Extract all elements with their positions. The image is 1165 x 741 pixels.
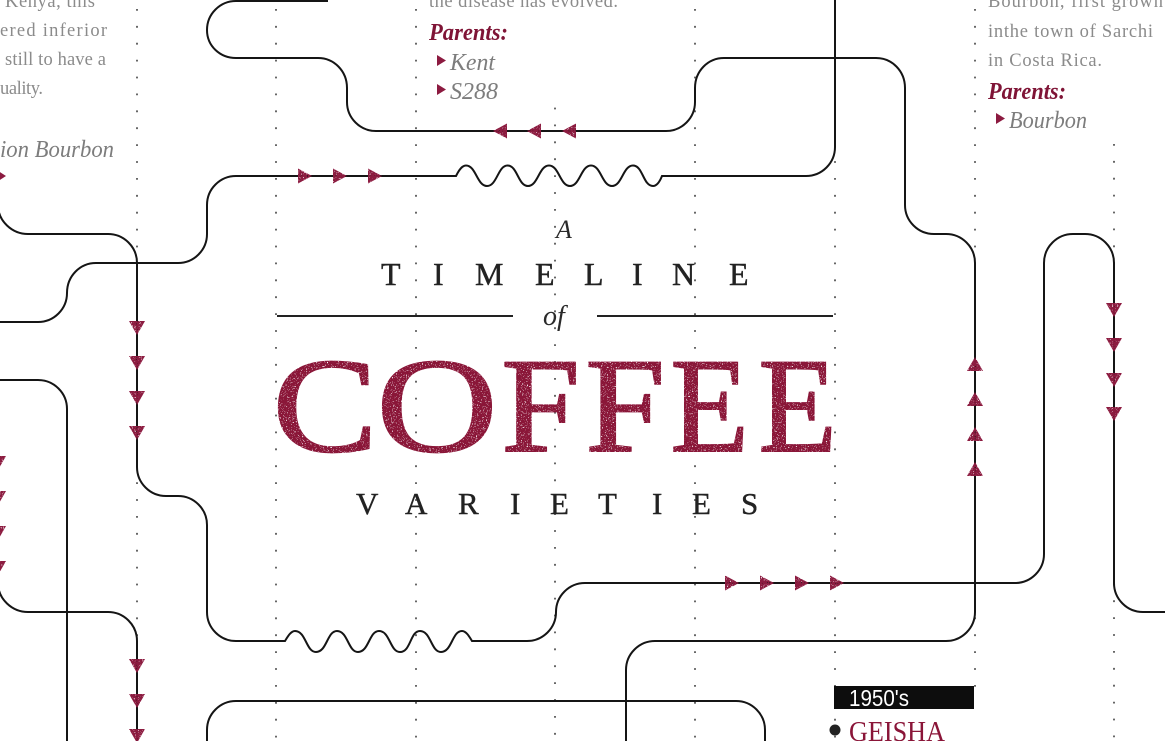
arrows: left column down bbox=[129, 321, 145, 440]
text block: right description and parents: inthe town of Sarchi bbox=[988, 22, 1153, 42]
text block: right description and parents bbox=[987, 0, 1163, 134]
title word: of: of bbox=[543, 301, 568, 332]
text block: right description and parents: Bourbon bbox=[1009, 108, 1087, 134]
title word: Coffee: F bbox=[501, 332, 580, 481]
arrows: top left-pointing bbox=[493, 124, 576, 138]
text block: centre description and parents bbox=[428, 0, 618, 105]
text block: left description bbox=[0, 0, 114, 183]
title word: Coffee: O bbox=[376, 332, 498, 481]
title bbox=[273, 215, 837, 521]
title word: Varieties: VARIETIES bbox=[356, 486, 758, 521]
arrows: top right-pointing bbox=[298, 168, 382, 184]
text block: right description and parents: in Costa Rica. bbox=[988, 51, 1102, 71]
title word: Coffee: C bbox=[273, 332, 378, 481]
decade label: 1950's bbox=[834, 685, 974, 711]
timeline line: left vertical bbox=[0, 380, 67, 741]
title rule left bbox=[277, 315, 513, 317]
text block: centre description and parents: S288 bbox=[450, 79, 498, 105]
title word: Coffee: E bbox=[670, 332, 749, 481]
text block: left description: uality. bbox=[0, 79, 43, 99]
decade label: 1950's: 1950's bbox=[849, 685, 909, 711]
text block: centre description and parents: Kent bbox=[449, 50, 496, 76]
title word: Coffee: F bbox=[585, 332, 665, 481]
title word: A: A bbox=[554, 215, 572, 244]
text block: left description: ered inferior bbox=[0, 21, 107, 41]
timeline line: left to top right with wave bbox=[0, 0, 835, 322]
arrows: lower right-pointing bbox=[725, 576, 844, 590]
title rule right bbox=[597, 315, 833, 317]
arrows: left edge down bbox=[0, 456, 6, 575]
timeline line: left through bottom wave to right bbox=[0, 205, 1165, 652]
text block: left description: ion Bourbon bbox=[0, 137, 114, 163]
text block: centre description and parents: Parents: bbox=[428, 20, 508, 46]
text block: left description: still to have a bbox=[5, 50, 106, 70]
title word: Timeline: TIMELINE bbox=[381, 256, 749, 292]
timeline line: bottom arch bbox=[207, 701, 765, 741]
arrows: far right down bbox=[1106, 303, 1122, 421]
timeline line: top loop to bottom centre bbox=[207, 1, 975, 741]
title word: Coffee: E bbox=[758, 332, 837, 481]
text block: right description and parents: Parents: bbox=[987, 79, 1066, 105]
arrows: centre right up bbox=[967, 357, 983, 476]
arrows: bottom left down bbox=[129, 659, 145, 741]
timeline line: lower left bbox=[0, 575, 137, 741]
